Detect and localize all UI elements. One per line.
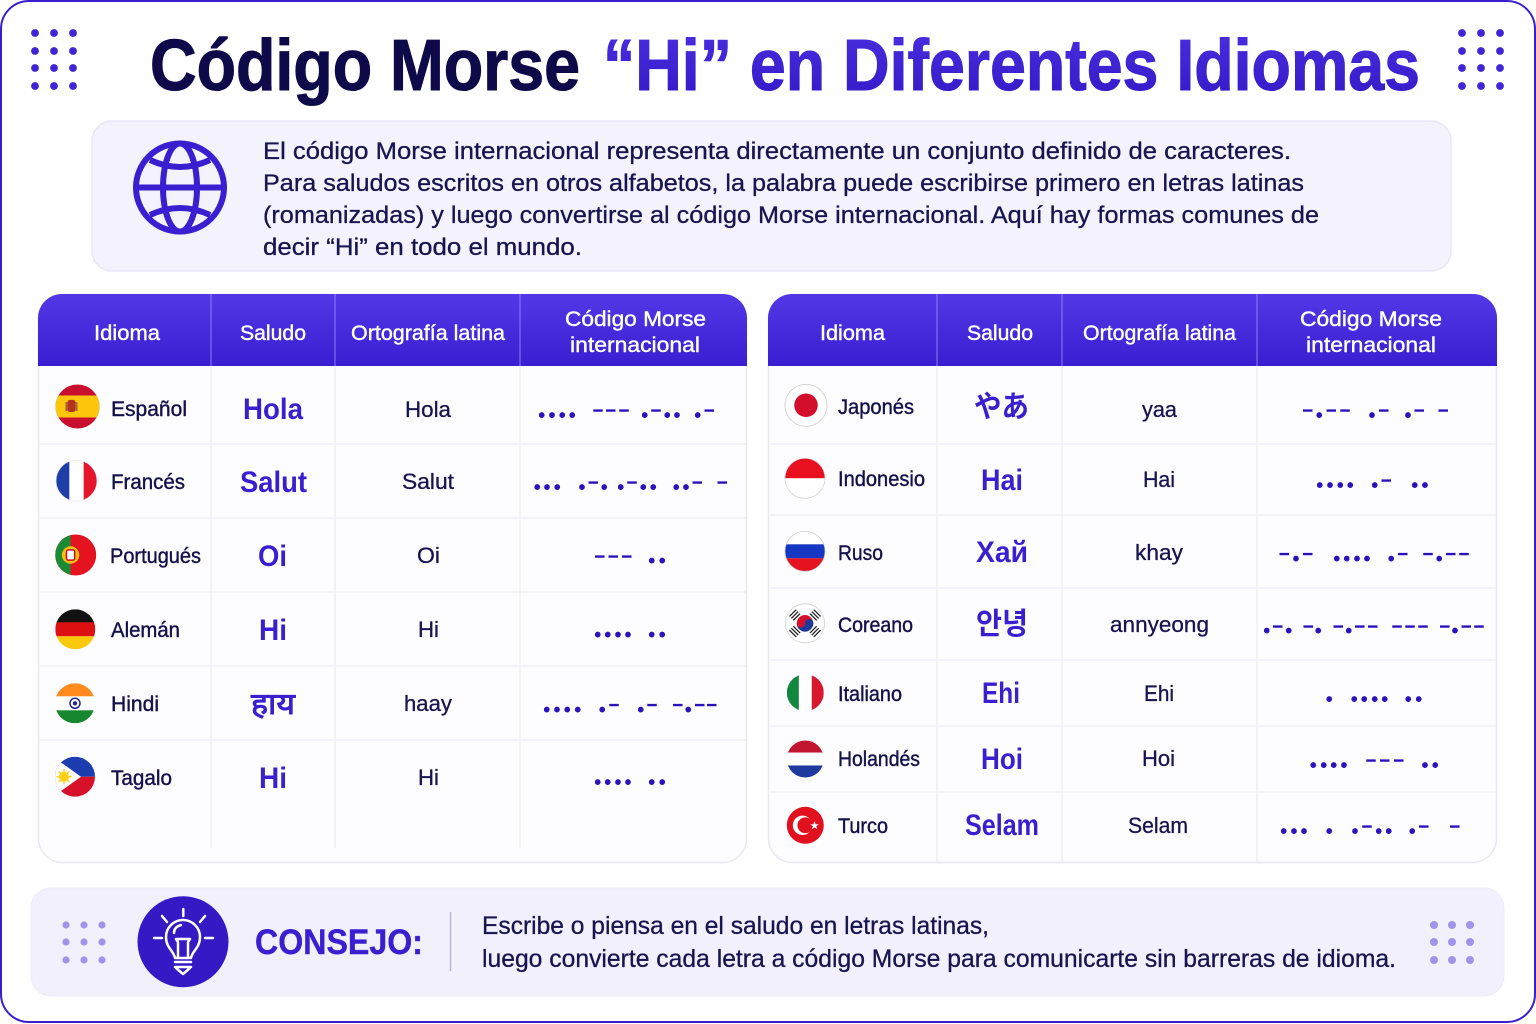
morse: haay: ––––– — [609, 694, 717, 714]
morse: annyeong: ––––––––––– — [1273, 615, 1484, 635]
row: Turco: Turco — [838, 815, 888, 838]
decorative dots top right — [1458, 29, 1504, 90]
morse: haay — [543, 694, 717, 721]
flag: India — [55, 683, 95, 723]
row: Francés: Salut — [402, 469, 454, 494]
morse: Hi (Tagalo): •••••• — [594, 772, 666, 794]
tip text: luego convierte cada letra a código Morse para comunicarte sin barreras de idioma. — [482, 945, 1396, 973]
right table header: Código Morse — [1300, 308, 1442, 331]
row: Japonés: yaa — [1142, 397, 1178, 422]
row: Tagalo: Tagalo — [111, 767, 172, 790]
row: Portugués: Oi — [417, 543, 440, 568]
tip text: Escribe o piensa en el saludo en letras latinas, — [482, 912, 989, 940]
flag: Germany — [55, 609, 95, 649]
morse: Selam: ––– — [1362, 815, 1460, 835]
row: Japonés: やあ — [974, 391, 1029, 424]
row: Indonesio: Hai — [981, 464, 1023, 497]
morse: Oi: ––– — [595, 546, 632, 566]
row: Tagalo — [53, 757, 666, 797]
morse: Hoi: •••••• — [1310, 755, 1439, 777]
flag: Spain — [56, 384, 100, 428]
row: Alemán — [55, 609, 666, 649]
row: Alemán: Alemán — [111, 619, 180, 642]
flag: Turkey — [787, 807, 824, 844]
morse: haay: ••••••• — [543, 699, 692, 721]
morse: yaa: –––––– — [1303, 399, 1448, 419]
left table header: Saludo — [240, 322, 306, 345]
morse: khay: –––––– — [1279, 543, 1469, 563]
left table header: Ortografía latina — [351, 322, 505, 345]
morse: yaa: ••• — [1316, 405, 1412, 427]
row: Alemán: Hi — [259, 614, 287, 647]
morse: Oi: •• — [648, 550, 666, 572]
left table header: internacional — [570, 334, 700, 357]
decorative dots tip right — [1430, 921, 1474, 964]
flag: Portugal — [55, 534, 96, 576]
row: Alemán: Hi — [418, 617, 439, 642]
row: Holandés: Hoi — [981, 743, 1023, 776]
row: Ruso: Ruso — [838, 542, 883, 565]
row: Coreano: Coreano — [838, 614, 913, 637]
row: Portugués: Oi — [258, 540, 287, 573]
flag: Russia — [785, 531, 825, 571]
left table header: Código Morse — [565, 308, 706, 331]
row: Hindi: Hindi — [111, 693, 159, 716]
intro text — [263, 138, 1319, 261]
row: Indonesio — [785, 458, 1429, 498]
decorative dots tip left — [62, 921, 106, 964]
intro text: decir “Hi” en todo el mundo. — [263, 234, 582, 261]
row: Holandés — [787, 740, 1439, 778]
row: Español: Hola — [243, 393, 303, 426]
row: Indonesio: Hai — [1143, 467, 1175, 492]
row: Italiano: Ehi — [982, 677, 1020, 710]
intro text: (romanizadas) y luego convertirse al código Morse internacional. Aquí hay formas comunes de — [263, 202, 1319, 229]
row: Español — [56, 384, 714, 428]
right table header — [768, 294, 1497, 366]
row: Tagalo: Hi — [418, 765, 439, 790]
row: Portugués — [55, 534, 666, 576]
morse: annyeong: ••••• — [1263, 620, 1459, 642]
panel: introduction — [92, 121, 1451, 271]
tip label: CONSEJO: — [255, 923, 423, 962]
title: “Hi” en Diferentes Idiomas — [603, 26, 1420, 106]
row: Hindi: हाय — [250, 688, 297, 721]
row: Indonesio: Indonesio — [838, 468, 925, 491]
row: Hindi: haay — [404, 691, 452, 716]
panel: left table — [38, 294, 747, 862]
morse: Hola: •••••••• — [538, 405, 701, 427]
morse: Ehi: ••••••• — [1326, 689, 1422, 711]
intro text: Para saludos escritos en otros alfabetos, la palabra puede escribirse primero en letras latinas — [263, 170, 1304, 197]
row: Coreano: 안녕 — [976, 608, 1028, 641]
flag: Philippines — [53, 757, 95, 797]
flag: France — [56, 460, 97, 501]
row: Japonés: Japonés — [838, 396, 914, 419]
morse: Oi — [595, 546, 666, 572]
morse: Hai: ••••••• — [1316, 475, 1429, 497]
row: Hindi — [55, 683, 717, 723]
decorative dots top left — [31, 29, 77, 90]
morse: Salut — [534, 472, 727, 499]
row: Ruso — [785, 531, 1469, 571]
row: Holandés: Hoi — [1142, 746, 1175, 771]
panel: tip — [31, 888, 1504, 996]
row: Holandés: Holandés — [838, 748, 920, 771]
row: Coreano: annyeong — [1110, 612, 1209, 637]
row: Turco: Selam — [1128, 813, 1188, 838]
morse: Hi (Alemán): •••••• — [594, 624, 666, 646]
morse: Hai: – — [1381, 470, 1391, 490]
row: Francés: Salut — [240, 466, 307, 499]
row: Italiano: Italiano — [838, 683, 902, 706]
right table header: Ortografía latina — [1083, 322, 1236, 345]
icon: globe — [136, 144, 224, 232]
title — [150, 26, 1420, 106]
row: Japonés — [785, 384, 1448, 427]
left table header: Idioma — [94, 322, 160, 345]
right table header: Idioma — [820, 322, 885, 345]
right table header: Saludo — [967, 322, 1033, 345]
title: Código Morse — [150, 26, 580, 106]
morse: Hoi: ––– — [1366, 750, 1404, 770]
intro text: El código Morse internacional representa directamente un conjunto definido de caracteres. — [263, 138, 1291, 165]
panel: right table — [768, 294, 1497, 862]
flag: Netherlands — [787, 740, 824, 778]
flag: Indonesia — [785, 458, 825, 498]
row: Francés — [56, 460, 727, 501]
morse: Selam: •••••••• — [1280, 821, 1416, 843]
tip text — [482, 912, 1396, 973]
row: Ruso: Хай — [976, 536, 1028, 569]
row: Francés: Francés — [111, 471, 185, 494]
row: Tagalo: Hi — [259, 762, 287, 795]
row: Español: Hola — [405, 397, 452, 422]
row: Español: Español — [111, 398, 187, 421]
morse: Hola: ––––– — [593, 399, 714, 419]
row: Italiano: Ehi — [1144, 681, 1174, 706]
morse: khay: ••••••• — [1292, 548, 1443, 570]
morse: Salut: –––– — [588, 472, 727, 492]
morse: Salut: •••••••••• — [534, 477, 690, 499]
row: Ruso: khay — [1135, 540, 1183, 565]
flag: Japan — [785, 384, 827, 426]
right table header: internacional — [1306, 334, 1436, 357]
row: Turco — [787, 807, 1460, 844]
flag: Italy — [787, 674, 824, 711]
morse: Selam — [1280, 815, 1460, 843]
row: Italiano — [787, 674, 1422, 711]
row: Coreano — [786, 604, 1484, 643]
row: Turco: Selam — [965, 809, 1039, 842]
flag: South Korea — [786, 604, 824, 643]
icon: light bulb — [138, 896, 228, 987]
row: Portugués: Portugués — [110, 545, 201, 568]
left table header — [38, 294, 747, 366]
